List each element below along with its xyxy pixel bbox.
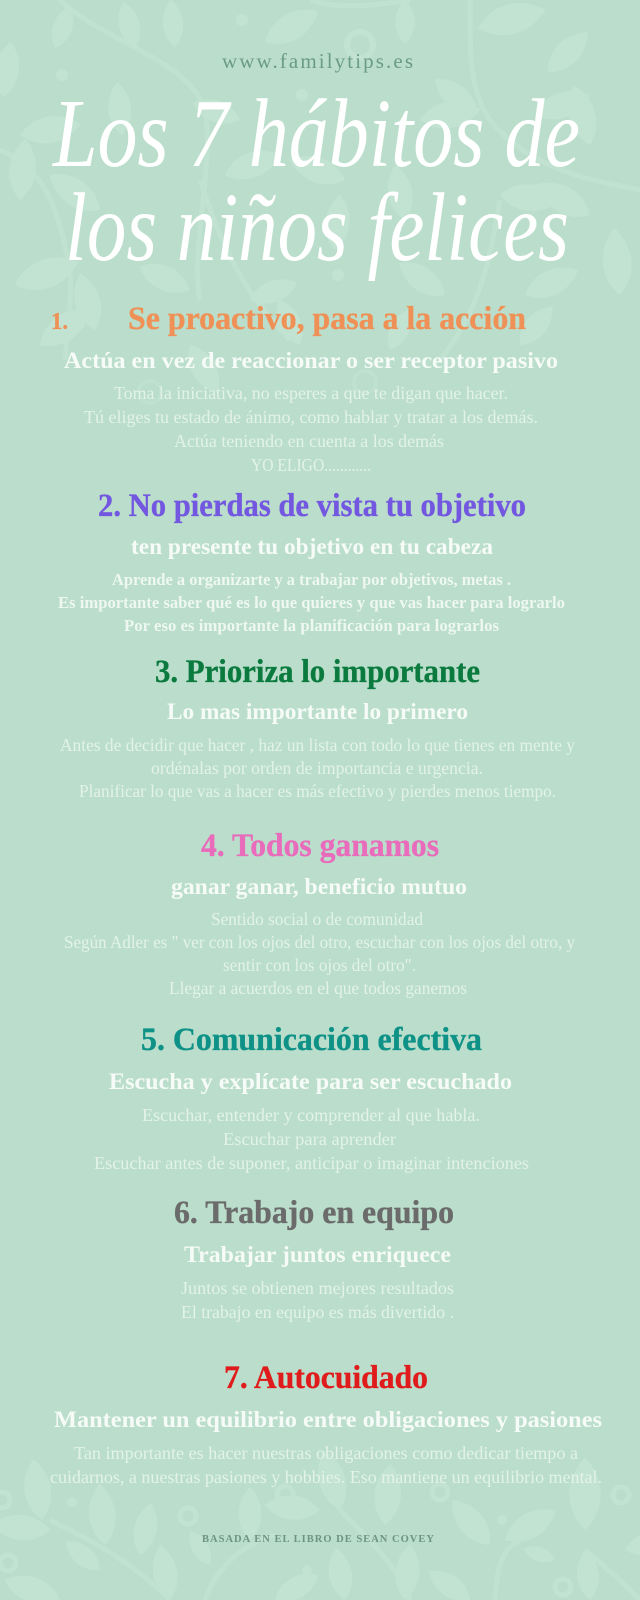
panel: habit 1 (51, 301, 558, 475)
body text: habit 2: Aprende a organizarte y a trabajar por objetivos, metas . (112, 570, 511, 589)
footer credit: BASADA EN EL LIBRO DE SEAN COVEY (202, 1534, 434, 1545)
panel: habit 4 (64, 828, 575, 998)
subheading: habit 2: ten presente tu objetivo en tu cabeza (131, 534, 493, 560)
body text: habit 4: Llegar a acuerdos en el que todos ganemos (169, 978, 467, 998)
body text: habit 2 (58, 570, 565, 635)
heading: habit 1: 1. (51, 309, 68, 335)
website url: www.familytips.es (222, 49, 413, 73)
panel: habit 3 (60, 654, 575, 801)
body text: habit 6 (181, 1278, 454, 1322)
body text: habit 2: Por eso es importante la planificación para lograrlos (124, 616, 500, 635)
body text: habit 2: Es importante saber qué es lo que quieres y que vas hacer para lograrlo (58, 593, 565, 612)
decoration: bottom foliage (0, 1447, 640, 1600)
subheading: habit 6: Trabajar juntos enriquece (184, 1242, 451, 1268)
heading: habit 4: 4. Todos ganamos (201, 828, 439, 864)
body text: habit 3: ordénalas por orden de importancia e urgencia. (151, 758, 483, 778)
subheading: habit 3: Lo mas importante lo primero (167, 699, 468, 725)
panel: habit 6 (174, 1195, 454, 1322)
body text: habit 3 (60, 735, 575, 801)
subheading: habit 5: Escucha y explícate para ser escuchado (109, 1069, 512, 1095)
body text: habit 5: Escuchar antes de suponer, anticipar o imaginar intenciones (94, 1153, 529, 1173)
body text: habit 4 (64, 909, 575, 998)
body text: habit 1: Tú eliges tu estado de ánimo, como hablar y tratar a los demás. (84, 407, 538, 427)
body text: habit 6: El trabajo en equipo es más divertido . (181, 1302, 454, 1322)
body text: habit 3: Antes de decidir que hacer , haz un lista con todo lo que tienes en mente y (60, 735, 575, 755)
body text: habit 5 (94, 1105, 529, 1173)
panel: habit 7 (50, 1360, 602, 1487)
body text: habit 1 (84, 383, 538, 475)
body text: habit 7: Tan importante es hacer nuestras obligaciones como dedicar tiempo a (74, 1443, 578, 1463)
heading: habit 5: 5. Comunicación efectiva (141, 1022, 482, 1058)
heading: habit 2: 2. No pierdas de vista tu objetivo (98, 488, 526, 524)
body text: habit 1: Actúa teniendo en cuenta a los demás (174, 431, 444, 451)
heading: habit 1: Se proactivo, pasa a la acción (128, 301, 526, 337)
body text: habit 6: Juntos se obtienen mejores resultados (181, 1278, 454, 1298)
panel: habit 2 (58, 488, 565, 635)
body text: habit 5: Escuchar, entender y comprender al que habla. (142, 1105, 480, 1125)
body text: habit 4: sentir con los ojos del otro". (223, 955, 416, 975)
subheading: habit 4: ganar ganar, beneficio mutuo (171, 874, 467, 900)
body text: habit 4: Según Adler es " ver con los ojos del otro, escuchar con los ojos del otro, y (64, 932, 575, 952)
heading: habit 7: 7. Autocuidado (224, 1360, 428, 1396)
body text: habit 3: Planificar lo que vas a hacer es más efectivo y pierdes menos tiempo. (79, 781, 556, 801)
heading: habit 3: 3. Prioriza lo importante (155, 654, 480, 690)
body text: habit 7 (50, 1443, 602, 1487)
decoration: top foliage (0, 0, 640, 403)
body text: habit 1: Toma la iniciativa, no esperes a que te digan que hacer. (114, 383, 508, 403)
subheading: habit 7: Mantener un equilibrio entre obligaciones y pasiones (54, 1407, 602, 1433)
panel: habit 5 (94, 1022, 529, 1173)
body text: habit 7: cuidarnos, a nuestras pasiones y hobbies. Eso mantiene un equilibrio mental. (50, 1467, 602, 1487)
subheading: habit 1: Actúa en vez de reaccionar o ser receptor pasivo (64, 348, 558, 374)
body text: habit 5: Escuchar para aprender (223, 1129, 396, 1149)
body text: habit 1: YO ELIGO............ (251, 455, 371, 475)
heading: habit 6: 6. Trabajo en equipo (174, 1195, 454, 1231)
body text: habit 4: Sentido social o de comunidad (211, 909, 423, 929)
title (51, 80, 580, 282)
